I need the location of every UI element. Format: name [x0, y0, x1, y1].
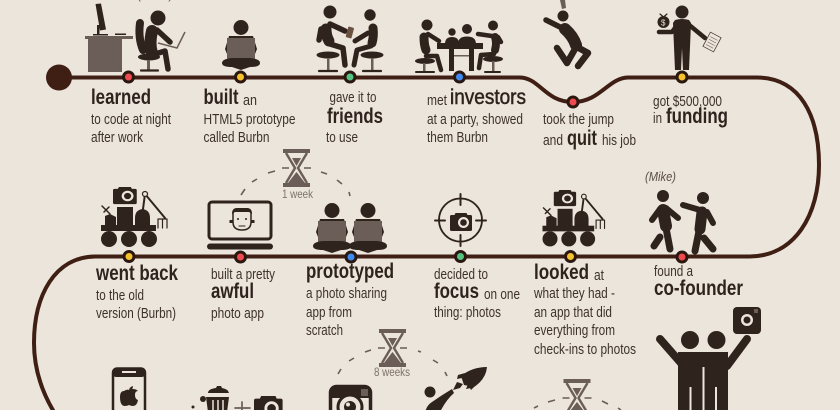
- dot: red: [236, 252, 246, 262]
- text: looked: [533, 261, 636, 358]
- text: friends: to use: [326, 129, 358, 146]
- dot: green: [345, 72, 355, 82]
- text: built: an: [243, 92, 257, 109]
- text: awful: built a pretty: [211, 266, 275, 283]
- text: went back: [95, 262, 178, 322]
- text: investors: at a party, showed: [427, 111, 523, 128]
- step: quit: [543, 0, 636, 150]
- text: built: [204, 86, 296, 146]
- annotation: hourglass at bottom: [534, 379, 621, 410]
- annotation: 1 week hourglass: 1 week: [282, 187, 314, 201]
- text: went back: went back: [95, 262, 178, 285]
- step: went back: [95, 187, 178, 322]
- text: funding: funding: [666, 105, 728, 128]
- dot: blue: [346, 252, 356, 262]
- text: quit: took the jump: [543, 111, 614, 128]
- text: looked: everything from: [534, 322, 615, 339]
- icon: man with money bag and document: $: [661, 18, 666, 28]
- text: learned: to code at night: [91, 111, 172, 128]
- text: learned: learned: [91, 86, 151, 109]
- dot: green: [456, 252, 466, 262]
- dot: red: [124, 72, 134, 82]
- text: looked: an app that did: [534, 304, 612, 321]
- timeline start marker: [46, 64, 72, 90]
- text: learned: [91, 86, 172, 146]
- text: funding: in: [653, 110, 662, 127]
- dot: yellow: [677, 72, 687, 82]
- text: built: built: [204, 86, 238, 109]
- icon: laptop with monster face: [207, 202, 273, 250]
- text: looked: what they had -: [533, 285, 615, 302]
- icon: founders holding instagram logo: [660, 307, 761, 410]
- text: friends: friends: [327, 105, 383, 128]
- text: focus: thing: photos: [434, 304, 501, 321]
- text: focus: focus: [434, 280, 479, 303]
- icon: two people sharing a phone: [316, 6, 384, 71]
- text: quit: quit: [567, 127, 597, 150]
- text: funding: [653, 93, 728, 128]
- text: prototyped: prototyped: [306, 260, 394, 283]
- step: learned: [85, 4, 185, 146]
- dot: red: [677, 252, 687, 262]
- text: focus: on one: [484, 286, 520, 303]
- text: looked: check-ins to photos: [534, 341, 636, 358]
- icon: instagram camera: [330, 386, 371, 410]
- step: focus: [434, 194, 520, 321]
- text: awful: photo app: [211, 305, 264, 322]
- text: prototyped: [306, 260, 394, 339]
- text: prototyped: scratch: [306, 322, 343, 339]
- timeline path: [34, 78, 819, 410]
- icon: person with laptop: [222, 20, 260, 70]
- text: prototyped: a photo sharing: [306, 285, 387, 302]
- text: funding: got $500,000: [653, 93, 722, 110]
- text: quit: [543, 111, 636, 150]
- step: looked: [533, 190, 636, 358]
- text: investors: [427, 86, 526, 146]
- icon: camera rover: [542, 190, 605, 246]
- text: looked: looked: [534, 261, 589, 284]
- dot: yellow: [236, 72, 246, 82]
- icon: iPhone with apple: [113, 368, 145, 410]
- text: quit: his job: [602, 132, 636, 149]
- annotation: 1 week hourglass: [241, 149, 350, 201]
- step: awful app: [207, 202, 275, 322]
- icon: jumping person: [546, 0, 588, 66]
- step: built: [204, 20, 296, 146]
- dot: red: [568, 97, 578, 107]
- text: co-founder: co-founder: [654, 277, 743, 300]
- text: co-founder: [654, 263, 743, 300]
- text: focus: decided to: [434, 266, 488, 283]
- text: went back: to the old: [96, 287, 144, 304]
- dot: yellow: [124, 252, 134, 262]
- step: friends: [316, 6, 384, 146]
- step: funding: [653, 6, 728, 128]
- text: co-founder: found a: [654, 263, 694, 280]
- icon: man launching rocket: [424, 367, 487, 410]
- text: awful: [211, 266, 275, 322]
- text: awful: awful: [211, 280, 254, 303]
- step: investors: [415, 20, 526, 146]
- annotation: 8 weeks hourglass: [338, 329, 447, 379]
- text: looked: at: [594, 267, 605, 284]
- text: quit: and: [543, 132, 563, 149]
- text: built: HTML5 prototype: [204, 111, 296, 128]
- text: built: called Burbn: [204, 129, 270, 146]
- text: focus: [434, 266, 520, 321]
- dot: blue: [454, 72, 464, 82]
- text: learned: after work: [91, 129, 143, 146]
- text: investors: met: [427, 92, 448, 109]
- text: investors: investors: [450, 86, 526, 109]
- step: prototyped: [306, 203, 394, 339]
- icon: person coding at desk: [85, 4, 185, 72]
- icon: two people walking: [652, 190, 713, 251]
- text: friends: gave it to: [330, 89, 376, 106]
- text: prototyped: app from: [306, 304, 352, 321]
- icon: camera rover: [101, 187, 167, 247]
- text: investors: them Burbn: [427, 129, 488, 146]
- dot: yellow: [566, 252, 576, 262]
- icon: camera in crosshair: [435, 194, 486, 246]
- caption: Mike: (Mike): [645, 169, 676, 184]
- text: friends: [326, 89, 383, 146]
- icon: trash can plus camera: [192, 386, 283, 410]
- icon: meeting at a table: [415, 20, 503, 72]
- annotation: 8 weeks hourglass: 8 weeks: [374, 365, 410, 379]
- icon: two people with laptops: [313, 203, 387, 253]
- step: co-founder: [645, 169, 743, 300]
- text: went back: version (Burbn): [96, 305, 176, 322]
